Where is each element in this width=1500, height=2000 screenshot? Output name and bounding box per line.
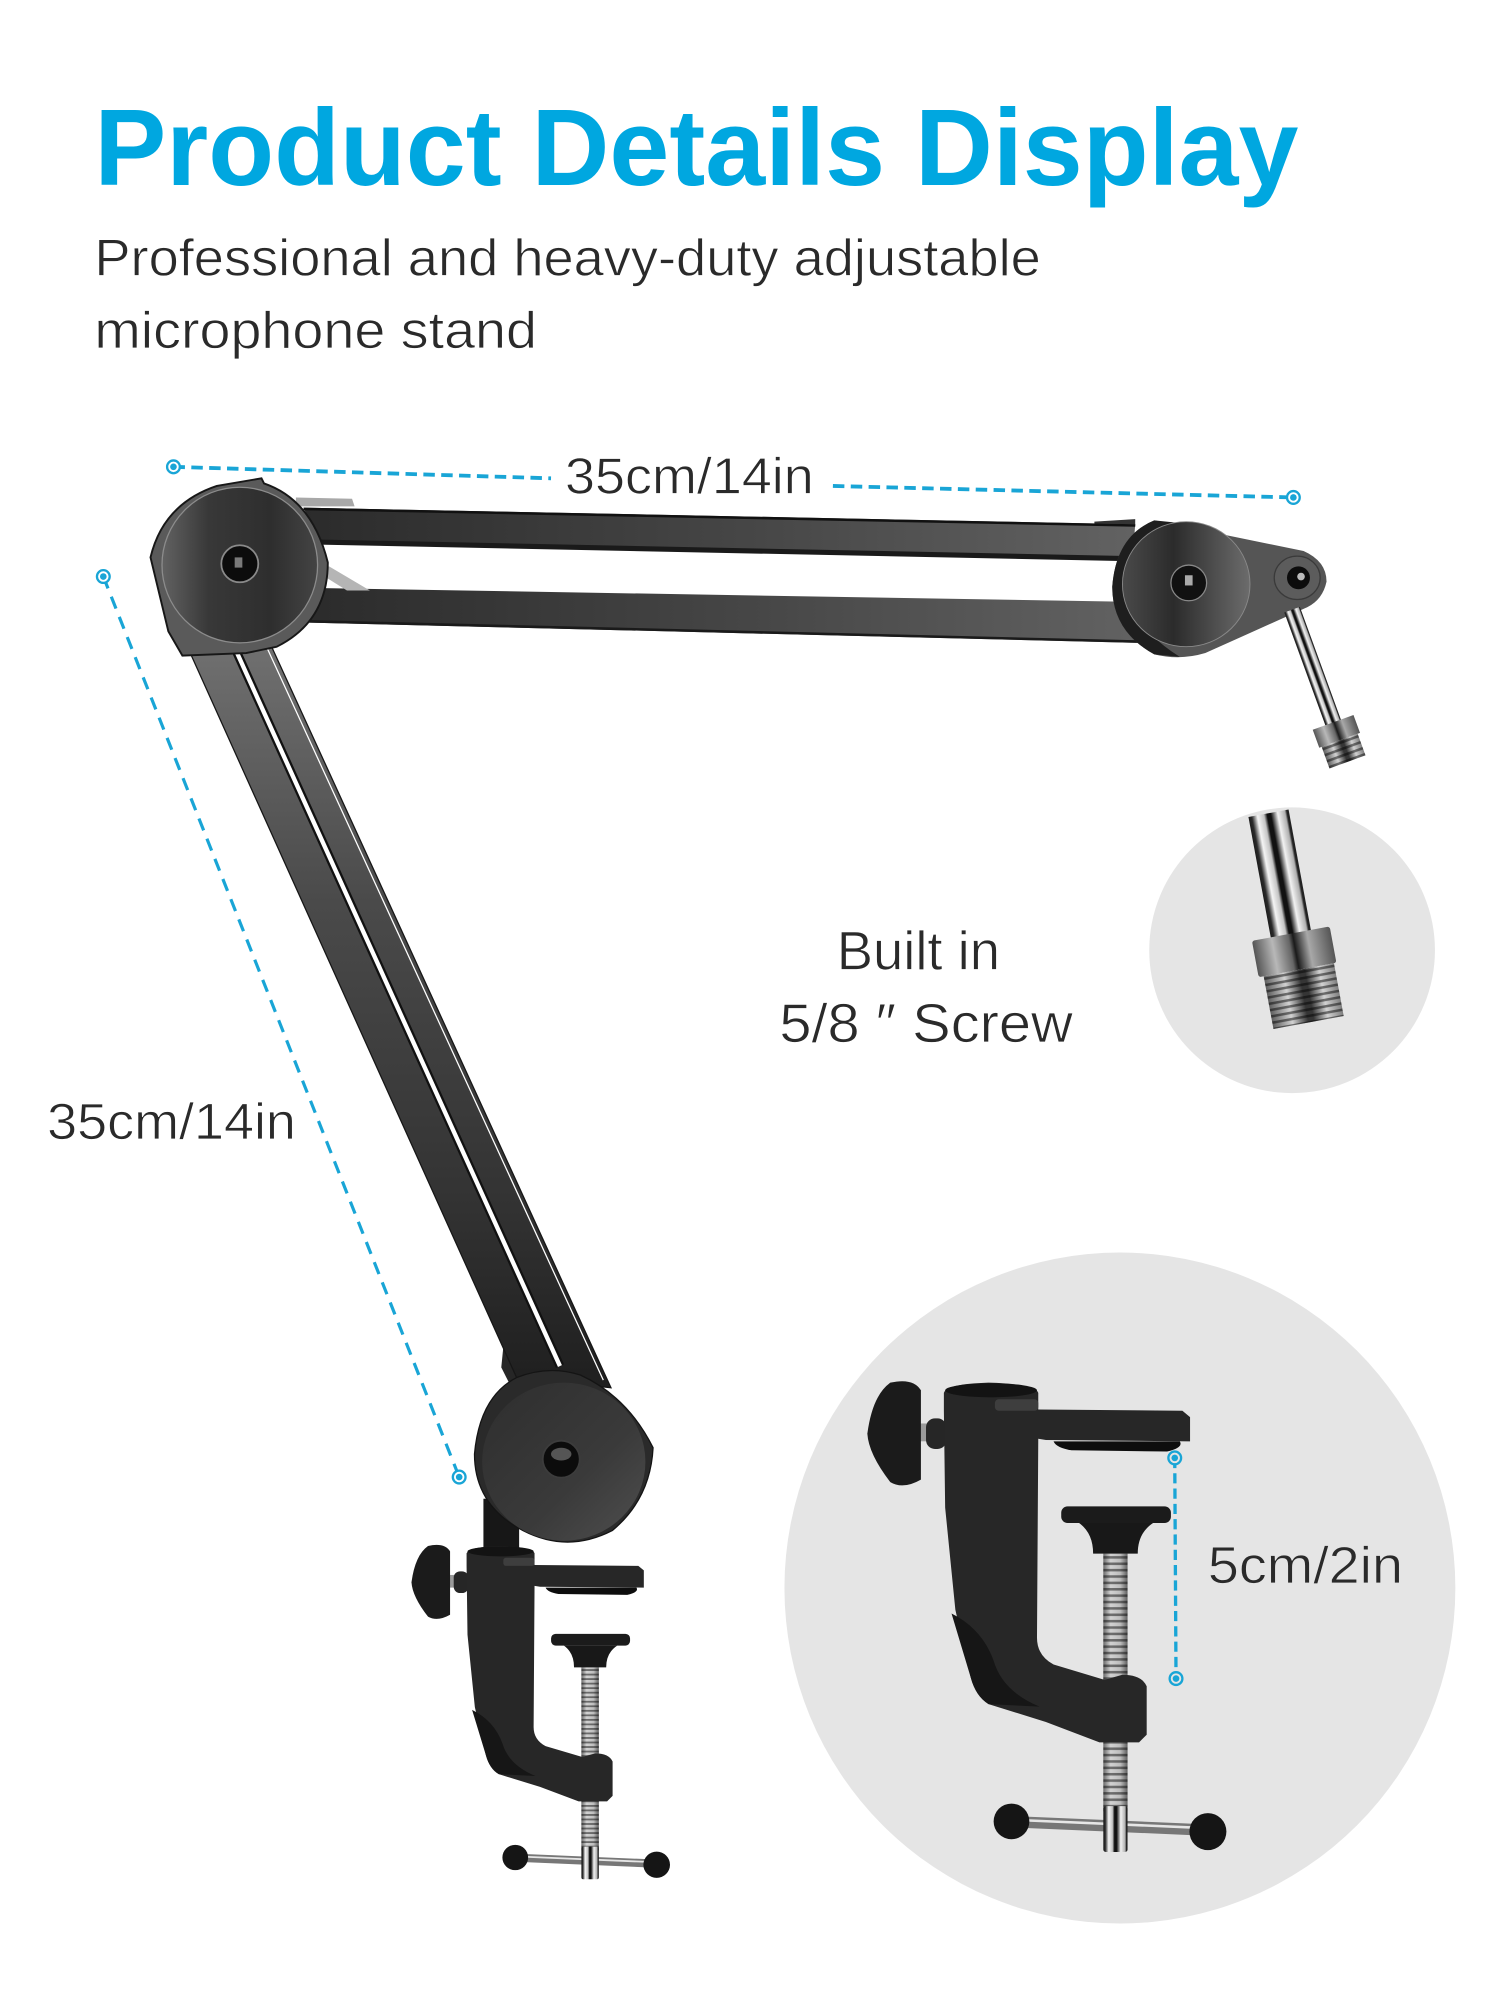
callout text: built in screw: 5/8 ″ Screw (779, 992, 1073, 1054)
callout text: built in screw: Built in (837, 919, 1000, 981)
title: Product Details Display (94, 87, 1298, 208)
joint: lower base (474, 1370, 653, 1552)
chrome rod and 5/8 screw (1272, 602, 1368, 769)
dimension: top arm length (167, 448, 1300, 505)
subtitle: microphone stand (94, 302, 537, 360)
horizontal upper arm (296, 497, 1142, 643)
dimension: clamp opening (1168, 1452, 1182, 1685)
diagonal lower arm (186, 644, 611, 1393)
joint: elbow left (151, 478, 328, 656)
chrome screw closeup (1230, 806, 1346, 1030)
dimension: top arm length: 35cm/14in (565, 448, 814, 505)
dimension: lower arm length: 35cm/14in (47, 1093, 296, 1150)
dimension: lower arm length (47, 570, 466, 1483)
panel: clamp detail circle (784, 1253, 1455, 1923)
callout text: built in screw (779, 919, 1073, 1054)
desk clamp large (867, 1381, 1226, 1852)
microphone boom arm (151, 478, 1368, 1879)
desk clamp small (411, 1545, 670, 1879)
panel: screw detail circle (1149, 806, 1435, 1093)
subtitle: Professional and heavy-duty adjustable (94, 230, 1041, 288)
subtitle (94, 230, 1041, 360)
joint: end right with mount (1112, 520, 1327, 657)
label: clamp opening: 5cm/2in (1208, 1537, 1403, 1595)
